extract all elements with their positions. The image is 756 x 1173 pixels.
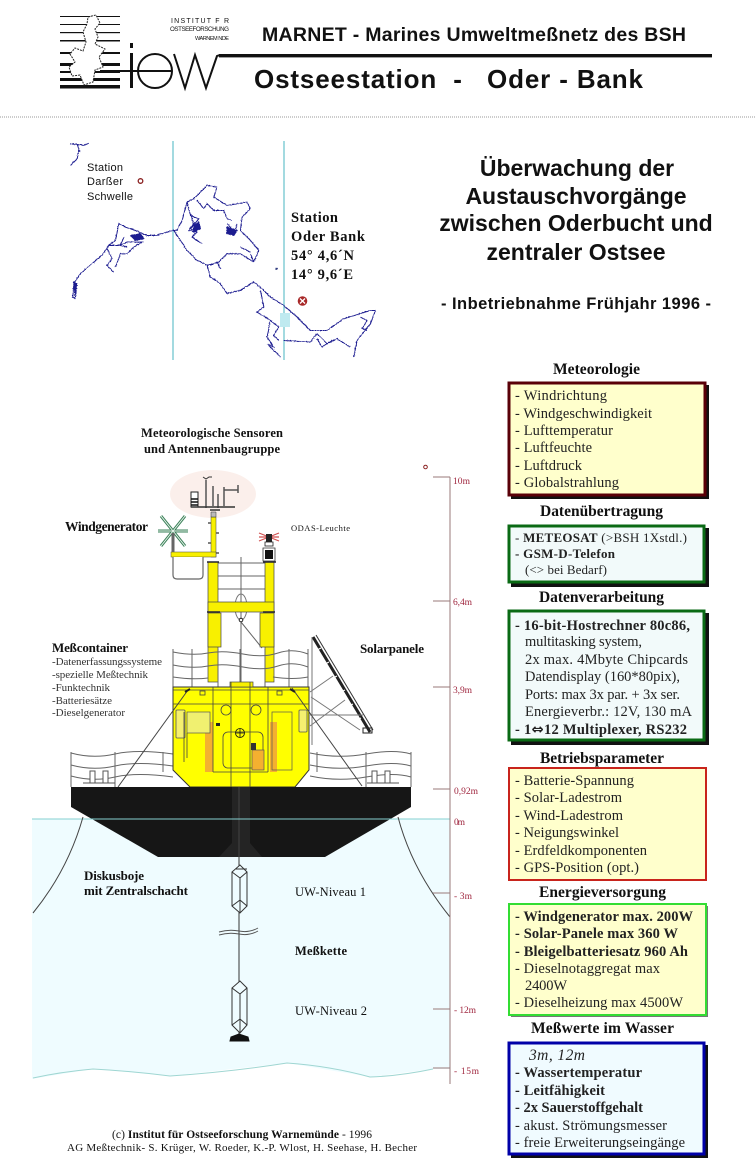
diagram labels: -Dieselgenerator [52, 707, 125, 719]
header subtitle: Ostseestation - Oder - Bank [254, 64, 644, 94]
map: Baltic coastline with stations: 14° 9,6´E [291, 267, 353, 283]
panel: Meteorologie: - Globalstrahlung [515, 475, 619, 491]
panel: Meßwerte im Wasser: Meßwerte im Wasser [531, 1020, 674, 1037]
map: Baltic coastline with stations [70, 141, 375, 360]
map: Baltic coastline with stations: 54° 4,6´N [291, 248, 355, 264]
footer credits: (c) Institut für Ostseeforschung Warnemünde - 1996 [112, 1129, 372, 1141]
depth scale: 0,92m [454, 787, 479, 797]
diagram labels: -Funktechnik [52, 682, 110, 694]
panel: Datenübertragung: - GSM-D-Telefon [515, 546, 616, 561]
depth scale: - 3m [454, 892, 473, 902]
heading: Überwachung: Austauschvorgänge [465, 183, 687, 209]
diagram labels: Windgenerator [65, 519, 148, 534]
panel: Meteorologie: - Windgeschwindigkeit [515, 406, 652, 422]
panel: Energieversorgung: - Bleigelbatteriesatz 960 Ah [515, 944, 688, 960]
heading: Überwachung: zwischen Oderbucht und [439, 210, 713, 236]
panel: Datenübertragung: (<> bei Bedarf) [525, 562, 607, 577]
diagram labels: Meteorologische Sensoren [141, 426, 283, 440]
panel: Energieversorgung: - Windgenerator max. 200W [515, 909, 694, 925]
diagram labels: UW-Niveau 2 [295, 1004, 367, 1018]
panel: Meteorologie: - Lufttemperatur [515, 423, 613, 439]
heading: Überwachung [439, 155, 713, 265]
header logo: IOW: OSTSEEFORSCHUNG [170, 26, 229, 33]
diagram: mooring lines [33, 817, 450, 917]
panel: Betriebsparameter: Betriebsparameter [540, 750, 664, 767]
panel: Datenübertragung [509, 503, 709, 587]
diagram labels: -Batteriesätze [52, 695, 112, 707]
panel: Betriebsparameter [509, 750, 706, 880]
panel: Datenübertragung: - METEOSAT (>BSH 1Xstdl.) [515, 530, 687, 545]
diagram: rigging stays [118, 688, 362, 787]
panel: Meßwerte im Wasser [509, 1020, 708, 1158]
map: Baltic coastline with stations: Oder Bank [291, 229, 366, 245]
panel: Datenübertragung: Datenübertragung [540, 503, 663, 520]
depth scale: 6,4m [453, 598, 473, 608]
map: Baltic coastline with stations: Schwelle [87, 191, 133, 203]
diagram: water body [32, 819, 450, 1079]
panel: Meteorologie: - Luftfeuchte [515, 440, 592, 456]
depth scale: - 12m [454, 1006, 477, 1016]
panel: Energieversorgung: - Dieselnotaggregat max [515, 961, 661, 977]
panel: Meßwerte im Wasser: - freie Erweiterungseingänge [515, 1135, 685, 1151]
header logo: IOW: INSTITUT F R [171, 18, 229, 25]
header logo: IOW: WARNEM NDE [195, 36, 229, 42]
panel: Meteorologie: - Luftdruck [515, 458, 583, 474]
diagram: measuring chain with sensors [219, 857, 258, 1041]
diagram labels: Meßkette [295, 944, 347, 958]
map: Baltic coastline with stations: Station [291, 210, 338, 226]
heading: Überwachung: Überwachung der [480, 155, 674, 181]
diagram labels [52, 426, 424, 1018]
panel: Energieversorgung: 2400W [525, 978, 567, 994]
diagram: deck railing [71, 649, 411, 787]
heading: Überwachung: zentraler Ostsee [487, 239, 665, 265]
header logo: IOW [60, 15, 712, 88]
panel: Datenverarbeitung [509, 589, 709, 745]
diagram labels: mit Zentralschacht [84, 883, 189, 898]
panel: Meßwerte im Wasser: - Leitfähigkeit [515, 1083, 605, 1099]
icon: ODAS light [259, 533, 279, 561]
icon: wind generator [158, 516, 188, 552]
panel: Datenverarbeitung: Energieverbr.: 12V, 130 mA [525, 704, 693, 720]
diagram labels: -spezielle Meßtechnik [52, 669, 148, 681]
panel: Datenverarbeitung: Ports: max 3x par. + 3x ser. [525, 687, 680, 703]
panel: Betriebsparameter: - Batterie-Spannung [515, 773, 634, 789]
map: Baltic coastline with stations: Darßer [87, 176, 123, 188]
commissioning note: - Inbetriebnahme Frühjahr 1996 - [441, 295, 711, 313]
diagram labels: Meßcontainer [52, 640, 128, 655]
panel: Meteorologie: - Windrichtung [515, 388, 607, 404]
map: Baltic coastline with stations: Station [87, 162, 123, 174]
panel: Meteorologie: Meteorologie [553, 361, 640, 378]
diagram labels: ODAS-Leuchte [291, 523, 350, 533]
diagram labels: UW-Niveau 1 [295, 885, 366, 899]
footer credits: AG Meßtechnik- S. Krüger, W. Roeder, K.-P. Wlost, H. Seehase, H. Becher [67, 1142, 417, 1154]
panel: Betriebsparameter: - Neigungswinkel [515, 825, 619, 841]
footer credits [67, 1129, 417, 1154]
diagram: discus buoy hull [71, 787, 411, 857]
depth scale: 0m [454, 818, 466, 828]
panel: Betriebsparameter: - Erdfeldkomponenten [515, 843, 648, 859]
panel: Energieversorgung [509, 884, 708, 1017]
panel: Energieversorgung: Energieversorgung [539, 884, 666, 901]
panel: Energieversorgung: - Solar-Panele max 360 W [515, 926, 678, 942]
panel: Datenverarbeitung: Datenverarbeitung [539, 589, 664, 606]
panel: Betriebsparameter: - GPS-Position (opt.) [515, 860, 639, 876]
panel: Datenverarbeitung: multitasking system, [525, 634, 642, 650]
panel: Meteorologie [509, 361, 709, 499]
panel: Datenverarbeitung: - 16-bit-Hostrechner 80c86, [515, 618, 690, 634]
depth scale: - 15m [454, 1067, 480, 1077]
depth scale: 3,9m [453, 686, 473, 696]
panel: Energieversorgung: - Dieselheizung max 4500W [515, 995, 683, 1011]
depth scale [424, 465, 480, 1084]
panel: Meßwerte im Wasser: - Wassertemperatur [515, 1065, 643, 1081]
panel: Meßwerte im Wasser: - akust. Strömungsmesser [515, 1118, 667, 1134]
icon: solar panel [310, 635, 373, 745]
panel: Datenverarbeitung: - 1⇔12 Multiplexer, RS232 [515, 722, 687, 738]
diagram labels: und Antennenbaugruppe [144, 442, 280, 456]
panel: Datenverarbeitung: 2x max. 4Mbyte Chipcards [525, 652, 688, 668]
panel: Meßwerte im Wasser: - 2x Sauerstoffgehalt [515, 1100, 643, 1116]
diagram labels: Diskusboje [84, 868, 144, 883]
diagram: sensor mast and meteorological sensors [170, 470, 256, 579]
depth scale: 10m [453, 477, 471, 487]
diagram: tower frame [207, 557, 276, 683]
header title: MARNET - Marines Umweltmeßnetz des BSH [262, 24, 686, 46]
panel: Meßwerte im Wasser: 3m, 12m [528, 1047, 585, 1064]
diagram: measurement container [173, 682, 309, 787]
diagram labels: Solarpanele [360, 641, 424, 656]
diagram labels: -Datenerfassungssysteme [52, 656, 162, 668]
panel: Betriebsparameter: - Solar-Ladestrom [515, 790, 623, 806]
panel: Datenverarbeitung: Datendisplay (160*80pix), [525, 669, 680, 685]
panel: Betriebsparameter: - Wind-Ladestrom [515, 808, 624, 824]
